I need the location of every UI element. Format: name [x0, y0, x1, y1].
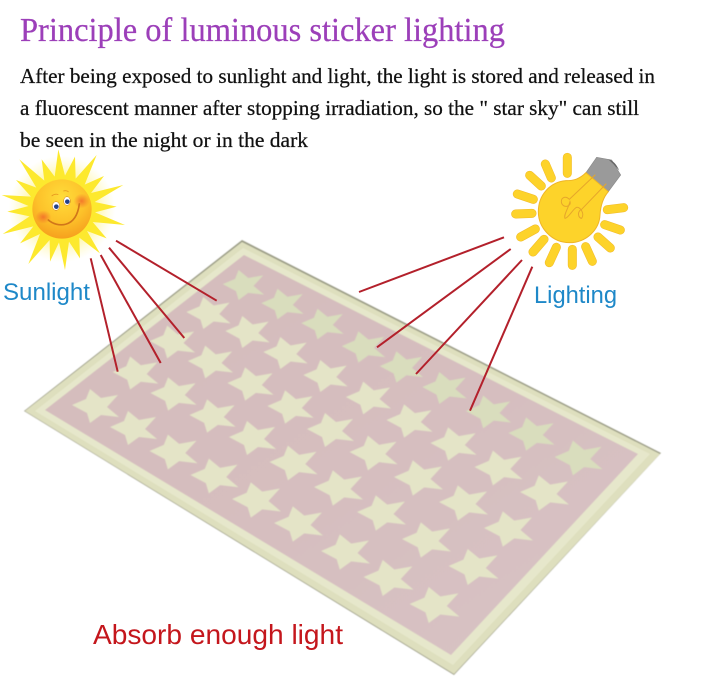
label: sunlight: Sunlight	[3, 279, 90, 306]
description text	[20, 64, 655, 152]
description text: be seen in the night or in the dark	[20, 128, 309, 152]
red light rays: sunlight	[91, 241, 217, 372]
bulb cap	[586, 157, 621, 192]
caption: absorb enough light: Absorb enough light	[93, 619, 343, 650]
icon: sun	[2, 149, 125, 270]
label: lighting: Lighting	[534, 282, 617, 309]
description text: After being exposed to sunlight and light, the light is stored and released in	[20, 64, 655, 88]
title: Principle of luminous sticker lighting	[20, 12, 505, 49]
star grid	[72, 270, 602, 623]
description text: a fluorescent manner after stopping irradiation, so the " star sky" can still	[20, 96, 639, 120]
icon: light bulb	[516, 157, 624, 265]
red light rays: lighting	[359, 237, 532, 411]
sticker sheet	[24, 240, 661, 675]
